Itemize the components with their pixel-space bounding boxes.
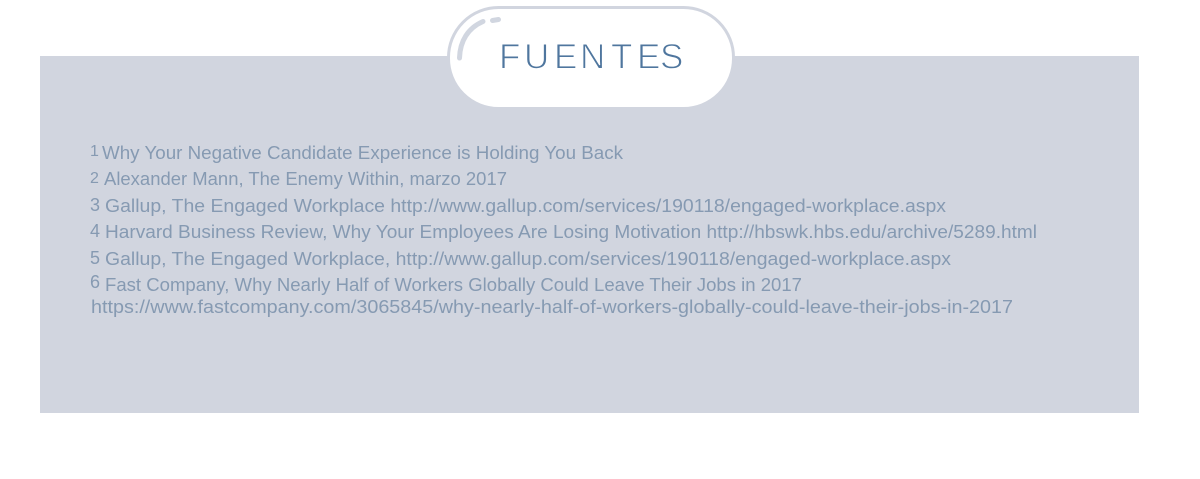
heading: FUENTES: FUENTES bbox=[499, 38, 683, 76]
source 5: Gallup, The Engaged Workplace, http://www.gallup.com/services/190118/engaged-workplace.aspx bbox=[105, 248, 952, 269]
source 3: Gallup, The Engaged Workplace http://www.gallup.com/services/190118/engaged-workplace.aspx bbox=[105, 195, 947, 216]
panel: sources background bbox=[40, 56, 1139, 413]
source 6: Fast Company, Why Nearly Half of Workers Globally Could Leave Their Jobs in 2017 bbox=[105, 274, 802, 295]
source 5: 5 bbox=[90, 248, 100, 268]
source 3: 3 bbox=[90, 195, 100, 215]
source 6: https://www.fastcompany.com/3065845/why-nearly-half-of-workers-globally-could-leave-their-jobs-in-2017 bbox=[91, 296, 1013, 317]
source 2: Alexander Mann, The Enemy Within, marzo 2017 bbox=[104, 168, 507, 189]
source 6: 6 bbox=[90, 272, 100, 292]
source 6 bbox=[90, 272, 1013, 317]
pill shape bbox=[448, 8, 734, 108]
source 1: 1 bbox=[90, 143, 99, 160]
source 4: Harvard Business Review, Why Your Employees Are Losing Motivation http://hbswk.hbs.edu/archive/5289.html bbox=[105, 221, 1037, 242]
source 4: 4 bbox=[90, 221, 100, 241]
source 2: 2 bbox=[90, 170, 99, 187]
title pill bbox=[448, 8, 734, 108]
icon: pill gloss highlight bbox=[460, 20, 498, 58]
source list bbox=[90, 142, 1037, 317]
source 1: Why Your Negative Candidate Experience is Holding You Back bbox=[102, 142, 624, 163]
